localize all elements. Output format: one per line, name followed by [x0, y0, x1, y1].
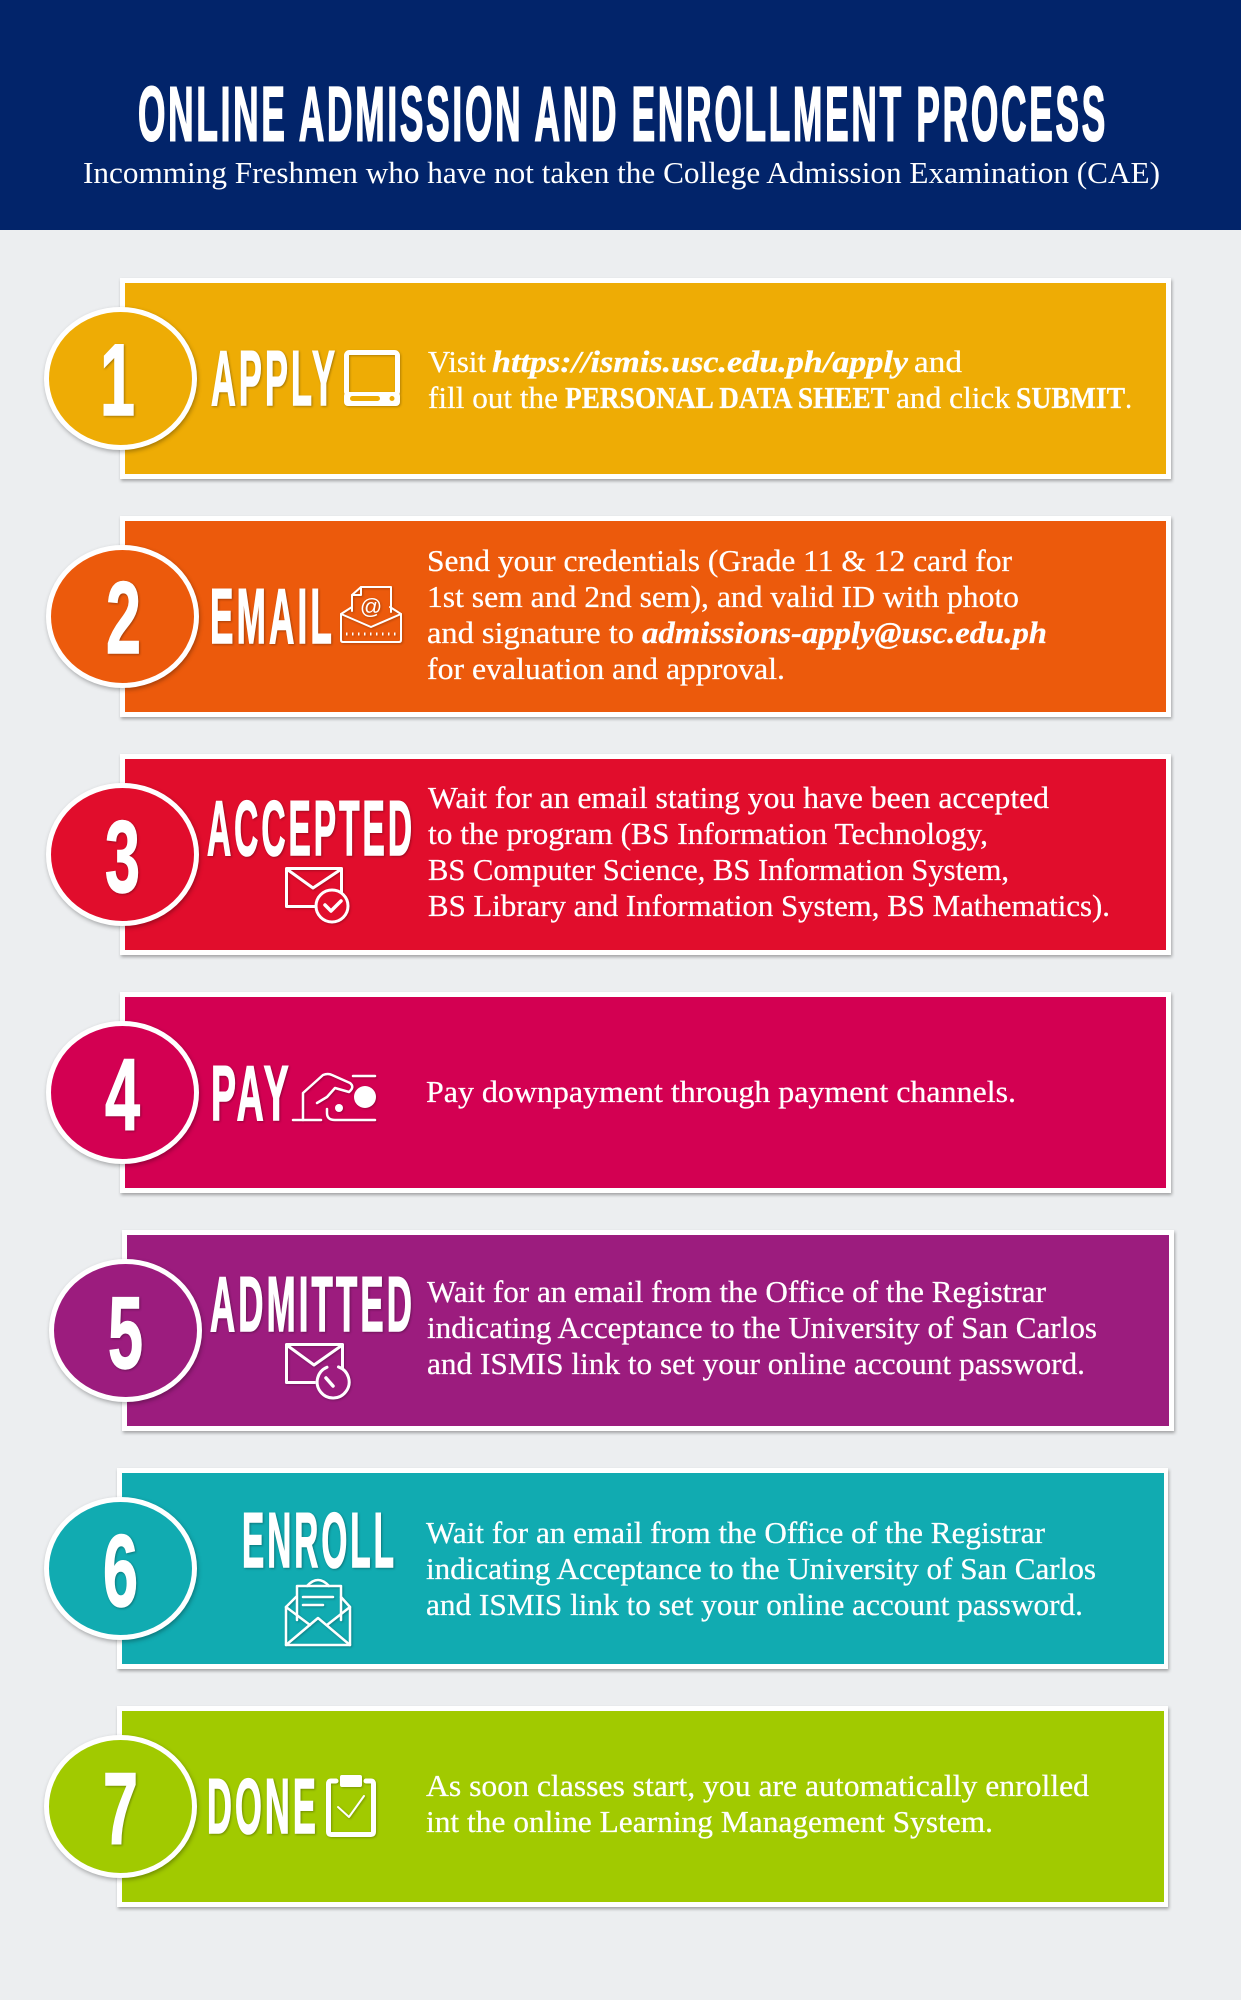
panel frame [120, 516, 1171, 717]
description: Wait for an email from the Office of the Registrar [427, 1274, 1047, 1309]
number: 7 [103, 1752, 138, 1866]
number: 4 [105, 1038, 140, 1152]
icon: hand payment [293, 1074, 376, 1120]
description: Wait for an email from the Office of the Registrar [426, 1515, 1046, 1550]
icon: envelope with check [286, 868, 348, 922]
number: 6 [103, 1514, 138, 1628]
icon: laptop [344, 352, 400, 406]
description: https://ismis.usc.edu.ph/apply [492, 344, 908, 379]
description: admissions-apply@usc.edu.ph [642, 615, 1047, 650]
panel: step 2 email [48, 516, 1171, 717]
description [426, 1515, 1096, 1622]
panel: step 7 done [46, 1706, 1168, 1907]
number circle [46, 1500, 194, 1638]
panel frame [117, 1468, 1168, 1669]
number circle [48, 786, 196, 924]
panel: step 1 apply [46, 278, 1171, 479]
description: fill out the [428, 380, 558, 415]
number: 5 [108, 1276, 143, 1390]
panel: step 3 accepted [48, 754, 1171, 955]
panel frame [120, 754, 1171, 955]
description: As soon classes start, you are automatically enrolled [426, 1768, 1090, 1803]
panel frame [120, 992, 1171, 1193]
panel fill [127, 1235, 1169, 1426]
icon: email envelope: @ [360, 594, 382, 619]
icon: clipboard check [328, 1775, 374, 1834]
panel: step 6 enroll: ENROLL [242, 1496, 397, 1584]
description [427, 543, 1047, 686]
description: Visit [428, 344, 486, 379]
description: and [914, 344, 963, 379]
panel frame [120, 278, 1171, 479]
number circle [48, 548, 196, 686]
icon: email envelope [341, 587, 401, 642]
number: 3 [105, 800, 140, 914]
description: PERSONAL DATA SHEET [565, 380, 889, 415]
icon: open envelope [286, 1580, 350, 1645]
panel fill [125, 997, 1166, 1188]
description [426, 1768, 1090, 1839]
panel: step 2 email: EMAIL [210, 572, 335, 660]
panel fill [125, 759, 1166, 950]
description: 1st sem and 2nd sem), and valid ID with photo [427, 579, 1019, 614]
description: indicating Acceptance to the University of San Carlos [427, 1310, 1097, 1345]
description: and signature to [427, 615, 634, 650]
panel: step 5 admitted: ADMITTED [210, 1260, 415, 1348]
number circle [46, 1738, 194, 1876]
panel frame [122, 1230, 1174, 1431]
description: and ISMIS link to set your online account password. [426, 1587, 1083, 1622]
panel: step 6 enroll [46, 1468, 1168, 1669]
panel: step 4 pay: PAY [211, 1049, 292, 1137]
description: for evaluation and approval. [427, 651, 785, 686]
description [428, 344, 1132, 415]
panel: step 3 accepted: ACCEPTED [207, 784, 415, 872]
panel fill [122, 1473, 1164, 1664]
number: 2 [106, 561, 141, 675]
number circle [46, 310, 194, 448]
number circle [48, 1024, 196, 1162]
subtitle: Incomming Freshmen who have not taken the College Admission Examination (CAE) [83, 155, 1160, 190]
number circle [52, 1262, 200, 1400]
description: BS Library and Information System, BS Mathematics). [428, 888, 1110, 923]
description [427, 1274, 1097, 1381]
panel: step 5 admitted [52, 1230, 1174, 1431]
description: Send your credentials (Grade 11 & 12 card for [427, 543, 1013, 578]
panel fill [125, 283, 1166, 474]
icon: envelope with timer [286, 1344, 350, 1400]
description [428, 780, 1110, 923]
panel fill [125, 521, 1166, 712]
panel: step 1 apply: APPLY [211, 334, 338, 422]
panel: step 7 done: DONE [207, 1762, 319, 1850]
description: indicating Acceptance to the University of San Carlos [426, 1551, 1096, 1586]
description: and click [896, 380, 1010, 415]
description: to the program (BS Information Technology, [428, 816, 988, 851]
description: int the online Learning Management System. [426, 1804, 993, 1839]
description: Pay downpayment through payment channels. [426, 1074, 1016, 1109]
description: BS Computer Science, BS Information System, [428, 852, 1009, 887]
panel frame [117, 1706, 1168, 1907]
header banner [0, 0, 1241, 230]
number: 1 [100, 323, 135, 437]
description: Wait for an email stating you have been accepted [428, 780, 1050, 815]
panel fill [122, 1711, 1164, 1902]
description: SUBMIT. [1016, 380, 1132, 415]
description: and ISMIS link to set your online account password. [427, 1346, 1085, 1381]
panel: step 4 pay [48, 992, 1171, 1193]
